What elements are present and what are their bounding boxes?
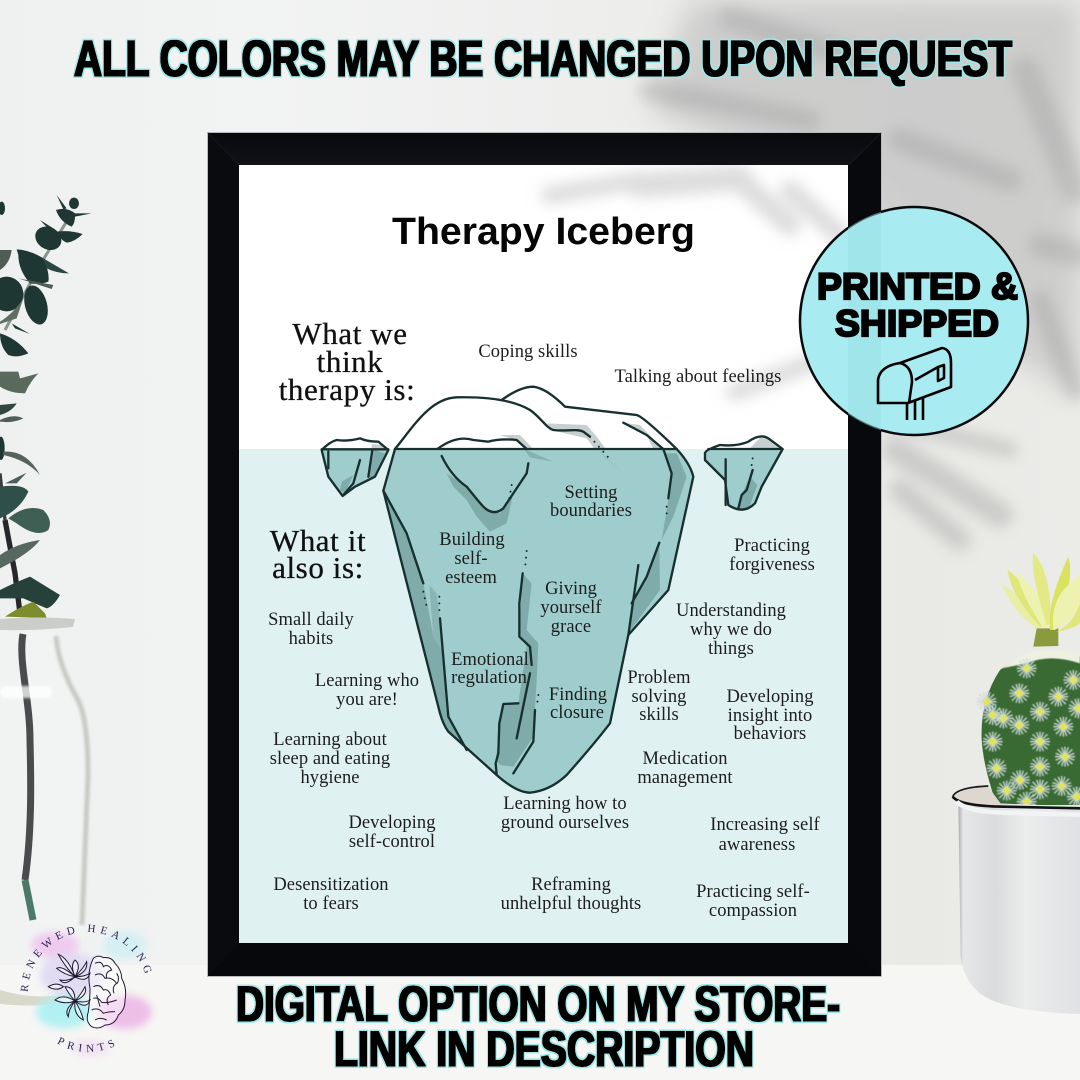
iceberg illustration (322, 387, 783, 793)
label: emotional regulation: Emotional (451, 650, 529, 670)
shelf surface (0, 965, 1080, 1080)
white pot (953, 786, 1080, 1014)
label: learning about sleep and eating hygiene: hygiene (300, 768, 360, 788)
label: learning about sleep and eating hygiene: sleep and eating (270, 749, 390, 769)
label: building self-esteem: Building (439, 530, 505, 550)
label: understanding why we do things: Understanding (676, 601, 786, 621)
label: setting boundaries: Setting (565, 483, 617, 503)
label: setting boundaries: boundaries (550, 501, 632, 521)
logo lettering bottom: PRINTS (57, 1036, 114, 1052)
heading: what we think therapy is: think (317, 344, 383, 379)
label: coping skills: Coping skills (478, 342, 578, 362)
fern shadow on poster (550, 178, 845, 392)
label: increasing self awareness: Increasing self (710, 815, 821, 835)
label: building self-esteem: self- (454, 549, 488, 569)
label: learning about sleep and eating hygiene: Learning about (273, 730, 388, 750)
main iceberg tip (395, 387, 677, 475)
heading: what we think therapy is: therapy is: (279, 372, 415, 407)
label: developing self-control: Developing (348, 813, 436, 833)
label: reframing unhelpful thoughts: Reframing (531, 875, 611, 895)
label: desensitization to fears: Desensitization (273, 875, 389, 895)
label: small daily habits: habits (289, 629, 333, 649)
label: medication management: management (637, 768, 733, 788)
bottom banner: DIGITAL OPTION ON MY STORE- (236, 976, 840, 1032)
label: emotional regulation: regulation (451, 668, 527, 688)
label: learning who you are: you are! (336, 690, 398, 710)
badge text: PRINTED & (817, 266, 1018, 307)
icon: brain with flowers (48, 954, 126, 1028)
cactus (977, 553, 1080, 812)
label: developing self-control: self-control (349, 832, 435, 852)
label: increasing self awareness: awareness (719, 835, 795, 855)
label: finding closure: closure (550, 703, 604, 723)
label: building self-esteem: esteem (445, 568, 497, 588)
label: developing insight into behaviors: insight into (728, 706, 812, 726)
heading: what we think therapy is: What we (292, 316, 408, 351)
label: reframing unhelpful thoughts: unhelpful thoughts (501, 894, 641, 914)
label: learning how to ground ourselves: ground ourselves (501, 813, 629, 833)
label: giving yourself grace: grace (551, 617, 591, 637)
label: practicing forgiveness: Practicing (734, 536, 810, 556)
bottom banner: LINK IN DESCRIPTION (334, 1021, 754, 1077)
label: problem solving skills: solving (631, 687, 687, 707)
label: giving yourself grace: yourself (540, 598, 602, 618)
badge: printed and shipped (800, 200, 1028, 440)
glass vase (0, 618, 89, 1006)
label: desensitization to fears: to fears (303, 894, 359, 914)
picture frame (207, 132, 882, 977)
heading: what it also is: What it (270, 523, 366, 558)
label: small daily habits: Small daily (268, 610, 354, 630)
label: finding closure: Finding (549, 685, 607, 705)
label: developing insight into behaviors: Developing (726, 687, 814, 707)
badge text: SHIPPED (835, 303, 999, 344)
label: problem solving skills: skills (639, 705, 679, 725)
logo: renewed healing prints (20, 924, 156, 1057)
label: problem solving skills: Problem (627, 668, 691, 688)
label: learning who you are: Learning who (315, 671, 419, 691)
label: understanding why we do things: things (708, 639, 754, 659)
label: understanding why we do things: why we do (690, 620, 772, 640)
label: medication management: Medication (642, 749, 728, 769)
title: Therapy Iceberg (392, 211, 695, 253)
fern shadow on wall (650, 0, 1080, 540)
label: giving yourself grace: Giving (545, 579, 597, 599)
poster (239, 165, 848, 943)
label: developing insight into behaviors: behaviors (734, 724, 806, 744)
main iceberg underwater body (383, 423, 693, 793)
heading: what it also is: also is: (272, 550, 364, 585)
logo lettering: RENEWED HEALING (20, 924, 152, 992)
label: practicing self-compassion: Practicing self- (696, 882, 810, 902)
small iceberg right (705, 436, 783, 510)
icon: mailbox (878, 348, 951, 420)
plant leaves (0, 195, 92, 618)
label: practicing forgiveness: forgiveness (729, 555, 815, 575)
small iceberg left (322, 438, 388, 496)
label: practicing self-compassion: compassion (709, 901, 797, 921)
label: talking about feelings: Talking about feelings (615, 367, 781, 387)
label: learning how to ground ourselves: Learning how to (503, 794, 627, 814)
